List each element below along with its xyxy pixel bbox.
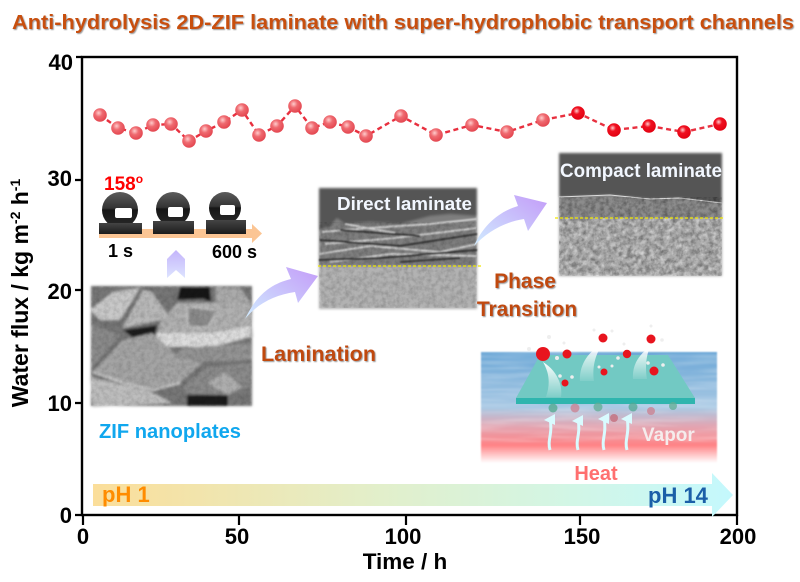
evaporation diagram <box>481 324 717 485</box>
y axis tick labels: 20 <box>48 279 72 304</box>
SEM image: direct laminate <box>318 188 481 309</box>
x axis tick labels <box>77 524 756 549</box>
end time label: 600 s <box>212 242 257 262</box>
y axis tick labels <box>48 50 73 528</box>
x axis tick labels: 50 <box>225 524 249 549</box>
x axis tick labels: 0 <box>77 524 89 549</box>
vapor plumes <box>543 345 650 397</box>
contact angle time arrow <box>99 224 262 243</box>
y axis title: -1 <box>7 179 23 191</box>
y axis title: -2 <box>7 211 23 224</box>
contact angle label: 158 <box>104 174 136 195</box>
water and heat background <box>481 352 717 463</box>
pH 14 label: pH 14 <box>648 483 709 508</box>
contact angle label: o <box>136 172 143 186</box>
label: ZIF nanoplates: ZIF nanoplates <box>99 420 241 443</box>
submerged particles <box>548 402 677 422</box>
water droplet 2 <box>153 192 194 234</box>
pH gradient arrow <box>93 473 733 517</box>
label: lamination: Lamination <box>261 343 376 366</box>
water flux data series <box>93 99 727 148</box>
curved arrow: phase transition <box>474 195 547 246</box>
heat label: Heat <box>574 463 618 485</box>
x axis tick labels: 100 <box>385 524 421 549</box>
molecule hydrogens <box>527 324 665 379</box>
start time label: 1 s <box>108 241 133 261</box>
x axis tick labels: 200 <box>720 524 756 549</box>
title: Anti-hydrolysis 2D-ZIF laminate with super-hydrophobic transport channels <box>12 12 794 34</box>
water droplet 3 <box>206 192 246 234</box>
label: phase transition <box>477 270 577 321</box>
y axis tick labels: 30 <box>48 166 72 191</box>
label: phase transition: Transition <box>477 298 577 321</box>
contact angle inset <box>99 172 262 262</box>
vapor label: Vapor <box>642 425 695 446</box>
water molecules <box>536 334 658 386</box>
SEM image: ZIF nanoplates <box>90 286 253 407</box>
water droplet 1 <box>99 192 142 234</box>
vapor rising arrows <box>549 417 628 450</box>
membrane plate <box>516 355 695 404</box>
x axis title: Time / h <box>363 549 447 574</box>
y axis title: Water flux / kg m <box>7 224 33 407</box>
arrow: nanoplates to contact angle <box>167 250 185 278</box>
direct laminate label: Direct laminate <box>337 194 472 214</box>
y axis tick labels: 40 <box>49 50 73 75</box>
curved arrow: lamination <box>245 267 318 319</box>
y axis tick labels: 10 <box>48 391 72 416</box>
pH 1 label: pH 1 <box>102 482 150 507</box>
label: phase transition: Phase <box>494 270 556 293</box>
compact laminate label: Compact laminate <box>560 160 722 182</box>
y axis tick labels: 0 <box>60 503 72 528</box>
SEM image: compact laminate <box>555 153 724 276</box>
chart axes <box>75 57 737 525</box>
y axis title: h <box>7 191 33 212</box>
x axis tick labels: 150 <box>564 524 600 549</box>
